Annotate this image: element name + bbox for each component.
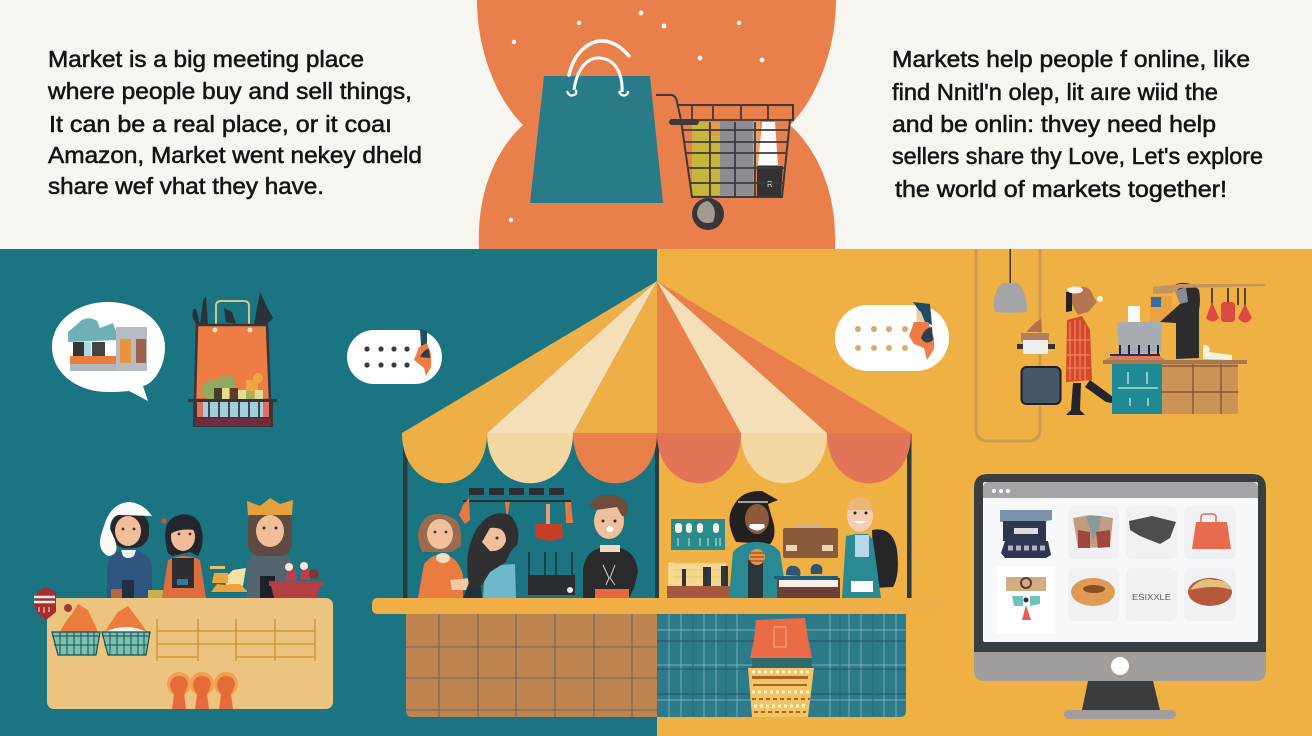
- text block: markets help people: find Nnitl'n olep, lit aıre wiid the: [892, 79, 1218, 105]
- speech bubble: dots with figure, right: [835, 302, 949, 371]
- kitchen scene: [976, 249, 1265, 441]
- counter front: teal plaid: [657, 614, 906, 717]
- text block: markets help people: [892, 46, 1263, 202]
- fence rack: [157, 619, 315, 661]
- text block: markets help people: the world of markets together!: [895, 176, 1227, 202]
- product: pastry: [1188, 578, 1232, 606]
- text block: market introduction: where people buy and sell things,: [47, 78, 412, 104]
- monitor screen: [983, 482, 1258, 642]
- food: cheese and pastries: [210, 566, 248, 592]
- monitor bezel: [974, 474, 1266, 652]
- counter plank: [372, 598, 942, 614]
- hanging goods rack: [459, 488, 573, 541]
- monitor chin: [974, 650, 1266, 681]
- person: seller with white headscarf: [100, 502, 152, 598]
- grey pot on counter: [1110, 306, 1162, 356]
- product: round bread: [1071, 578, 1115, 606]
- market stall: centre: [372, 281, 942, 717]
- striped awning: [402, 281, 911, 483]
- product: grey bundle: [1129, 516, 1176, 544]
- kitchen counter: [1103, 356, 1247, 414]
- icon: shopping cart: R: [767, 180, 773, 189]
- text block: market introduction: [47, 46, 422, 199]
- person: seller in orange dress: [148, 514, 206, 598]
- person: seller with brown hair: [418, 514, 481, 598]
- monitor base: [1064, 710, 1176, 719]
- icon: dark box: [1022, 367, 1060, 404]
- basket with orange lid: [748, 618, 814, 717]
- person: seller in black sweater: [583, 495, 638, 598]
- text block: markets help people: sellers share thy Love, Let's explore: [892, 143, 1263, 169]
- baskets of food: [52, 604, 150, 655]
- sign board with hooks: [671, 519, 725, 550]
- stall posts: [403, 434, 912, 598]
- counter front: brown tiles: [406, 614, 657, 717]
- desktop monitor with online shop: [974, 474, 1266, 719]
- brown briefcase: [783, 524, 838, 558]
- product label: ESIXXLE: [1132, 592, 1171, 602]
- price tag: [34, 587, 72, 620]
- power button: [1111, 657, 1129, 675]
- pipe: [976, 249, 1040, 441]
- table panel: left market stall: [34, 498, 333, 709]
- person: woman in teal coat: [729, 491, 787, 598]
- speech bubble: dots with figure, left: [347, 329, 442, 384]
- text block: market introduction: Amazon, Market went nekey dheld: [48, 142, 422, 168]
- icon: hanging lamp: [994, 249, 1027, 313]
- person: cook in red coat: [1066, 286, 1113, 415]
- speech bubble: storefront: [52, 302, 165, 401]
- product cards: [1068, 506, 1236, 621]
- icon: shopping bag: [530, 41, 663, 203]
- text block: market introduction: It can be a real place, or it coaı: [49, 111, 392, 137]
- text block: markets help people: and be onlin: thvey need help: [892, 111, 1216, 137]
- icon: cooking pot: [1017, 319, 1055, 354]
- tray with blue items: [774, 564, 840, 598]
- person: blond seller with apron: [842, 497, 898, 598]
- person: seller with crown: [247, 498, 297, 598]
- product: typewriter: [1000, 510, 1052, 558]
- counter top: [47, 598, 333, 709]
- black bag on rack: [528, 552, 575, 595]
- text block: market introduction: Market is a big meeting place: [48, 46, 364, 72]
- product: orange handbag: [1192, 514, 1231, 549]
- person: cook in dark robe: [1150, 283, 1232, 360]
- monitor stand: [1082, 681, 1160, 710]
- shelf with hanging utensils: [1153, 284, 1265, 322]
- illustration: orange blob with shopping bag and cart: [477, 0, 836, 249]
- orange vases: [167, 672, 238, 709]
- tray with stacked goods: [667, 563, 735, 598]
- text block: market introduction: share wef vhat they have.: [48, 173, 324, 199]
- icon: shopping cart: [656, 95, 793, 230]
- red pot with desserts: [269, 562, 324, 598]
- browser title bar: [983, 482, 1258, 498]
- icon: orange shopping bag with produce: [188, 292, 277, 427]
- person: seller with long black hair: [463, 513, 518, 598]
- text block: markets help people: Markets help people f online, like: [892, 46, 1250, 72]
- product: knitted mittens: [1073, 515, 1113, 548]
- product: illustrated poster: [997, 566, 1055, 634]
